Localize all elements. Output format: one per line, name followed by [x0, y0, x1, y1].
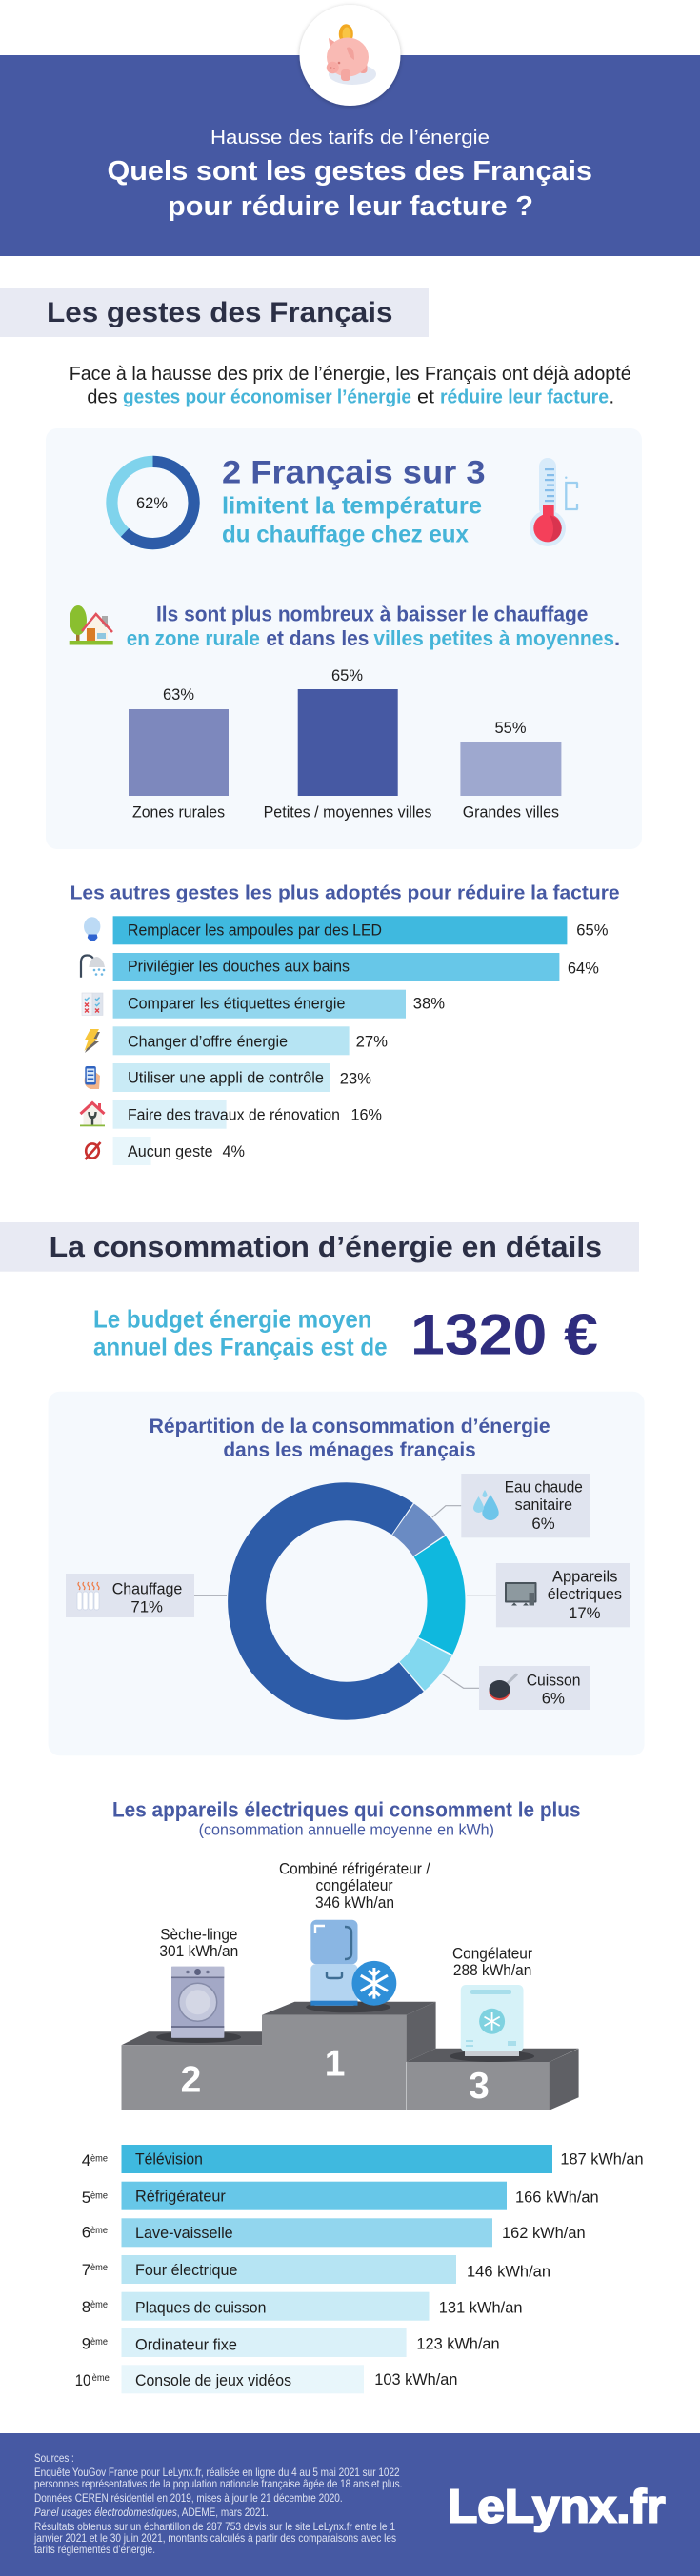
- heading: energy consumption: La consommation d’énergie en détails: [50, 1230, 602, 1263]
- panel: energy breakdown: [49, 1392, 645, 1755]
- main title: pour réduire leur facture ?: [168, 191, 533, 222]
- panel title: dans les ménages français: [223, 1439, 476, 1461]
- bar chart: other actions: 27%: [356, 1032, 388, 1050]
- ranking labels: 8: [82, 2298, 90, 2316]
- callout: hot water 6%: Eau chaude: [505, 1477, 583, 1496]
- logo: LeLynx.fr: LeLynx.fr: [448, 2481, 665, 2532]
- bar chart: other actions: Comparer les étiquettes énergie: [128, 994, 345, 1012]
- bar chart: other actions: 23%: [340, 1069, 371, 1087]
- bar chart: by area: 63%: [163, 685, 194, 703]
- podium: 2: [181, 2059, 201, 2100]
- icon: radiator: [77, 1582, 99, 1610]
- intro text: .: [610, 386, 614, 407]
- footer band: [0, 2433, 700, 2576]
- podium labels: [159, 1859, 532, 1979]
- callout: cooking 6%: [442, 1666, 590, 1710]
- heading: Les gestes des Français: [0, 288, 429, 337]
- bar chart: other actions: 16%: [350, 1106, 382, 1124]
- sources text: Sources :: [34, 2451, 74, 2465]
- sources text: [33, 2451, 402, 2556]
- subheading: rural areas: Ils sont plus nombreux à baisser le chauffage: [156, 603, 588, 626]
- panel title: Répartition de la consommation d’énergie: [150, 1416, 550, 1437]
- callout: heating 71%: Chauffage: [112, 1579, 182, 1597]
- intro text: et: [417, 386, 434, 407]
- icon: energy labels: [82, 993, 103, 1015]
- bar chart: appliances ranking: 166 kWh/an: [515, 2188, 599, 2206]
- podium labels: 301 kWh/an: [159, 1942, 238, 1960]
- heading: top appliances: Les appareils électriques qui consomment le plus: [112, 1797, 581, 1821]
- callout: annual budget: [93, 1302, 598, 1366]
- sources text: janvier 2021 et le 30 juin 2021, montants calculés à partir des comparaisons avec les: [33, 2531, 396, 2545]
- intro text: des: [87, 386, 117, 407]
- heading: other actions: Les autres gestes les plus adoptés pour réduire la facture: [70, 882, 620, 904]
- bar chart: other actions: Utiliser une appli de contrôle: [128, 1068, 324, 1086]
- bar chart: other actions: 38%: [413, 994, 445, 1012]
- bar chart: other actions: Aucun geste: [128, 1142, 213, 1160]
- callout: hot water 6%: [432, 1474, 590, 1537]
- callout: appliances 17%: 17%: [569, 1604, 601, 1622]
- icon: lightning: [84, 1029, 100, 1053]
- bar chart: other actions: 65%: [576, 921, 608, 940]
- icon: LED bulb: [84, 917, 100, 941]
- bar chart: appliances ranking: 146 kWh/an: [467, 2263, 550, 2281]
- callout: appliances 17%: [467, 1563, 630, 1627]
- icon: smartphone: [85, 1066, 100, 1089]
- ranking labels: 5: [82, 2189, 90, 2207]
- bar chart: appliances ranking: Ordinateur fixe: [135, 2335, 237, 2353]
- ranking labels: ème: [90, 2226, 108, 2236]
- headline: 2 Français sur 3: du chauffage chez eux: [222, 521, 469, 547]
- ranking labels: 4: [82, 2151, 90, 2170]
- bar chart: appliances ranking: Console de jeux vidéos: [135, 2371, 291, 2389]
- donut chart: energy use: [247, 1501, 447, 1701]
- podium labels: Congélateur: [452, 1944, 532, 1962]
- ranking labels: ème: [90, 2300, 108, 2310]
- callout: appliances 17%: électriques: [548, 1585, 622, 1603]
- main title: [107, 156, 592, 222]
- bar chart: other actions: Changer d’offre énergie: [128, 1032, 288, 1050]
- subheading: rural areas: [127, 603, 620, 650]
- bar chart: appliances ranking: 103 kWh/an: [374, 2370, 457, 2388]
- ranking labels: 10: [75, 2371, 90, 2389]
- heading: top appliances: (consommation annuelle moyenne en kWh): [199, 1821, 494, 1838]
- subheading: rural areas: en zone rurale: [127, 626, 260, 650]
- main title: Quels sont les gestes des Français: [107, 156, 592, 187]
- podium: [122, 2001, 579, 2110]
- bar chart: appliances ranking: 123 kWh/an: [416, 2334, 500, 2352]
- icon: freezer: [461, 1985, 524, 2056]
- bar chart: other actions: Privilégier les douches aux bains: [128, 958, 350, 976]
- sources text: Résultats obtenus sur un échantillon de 287 753 devis sur le site LeLynx.fr entre le 1: [34, 2520, 395, 2533]
- bar chart: by area: 55%: [495, 719, 526, 737]
- bar chart: other actions: Faire des travaux de rénovation: [128, 1106, 340, 1124]
- sources text: Données CEREN résidentiel en 2019, mises à jour le 21 décembre 2020.: [34, 2491, 343, 2505]
- callout: heating 71%: [66, 1574, 227, 1617]
- intro text: gestes pour économiser l’énergie: [123, 386, 411, 407]
- intro text: réduire leur facture: [440, 386, 609, 407]
- subheading: rural areas: et dans les: [266, 626, 369, 650]
- bar chart: other actions: 4%: [223, 1142, 245, 1160]
- header band: [0, 55, 700, 256]
- ranking labels: 6: [82, 2224, 90, 2242]
- panel: heating: [46, 428, 642, 849]
- bar chart: appliances ranking: [122, 2145, 644, 2393]
- bar chart: appliances ranking: 162 kWh/an: [502, 2224, 586, 2242]
- icon: piggy bank in circle: [299, 5, 400, 106]
- podium labels: 346 kWh/an: [315, 1893, 394, 1912]
- sources text: Enquête YouGov France pour LeLynx.fr, réalisée en ligne du 4 au 5 mai 2021 sur 1022: [34, 2466, 400, 2479]
- icon: shower: [81, 956, 105, 978]
- intro text: [70, 364, 631, 407]
- heading: Les gestes des Français: Les gestes des Français: [47, 297, 393, 328]
- sources text: Panel usages électrodomestiques, ADEME, mars 2021.: [34, 2506, 269, 2519]
- bar chart: appliances ranking: Réfrigérateur: [135, 2187, 226, 2205]
- icon: thermometer: [530, 458, 578, 546]
- subheading: rural areas: villes petites à moyennes: [373, 626, 614, 650]
- podium labels: 288 kWh/an: [453, 1961, 531, 1979]
- podium labels: congélateur: [316, 1876, 393, 1894]
- ranking labels: 9: [82, 2335, 90, 2353]
- podium: 3: [469, 2066, 490, 2107]
- donut chart: 62%: 62%: [136, 494, 168, 512]
- icon: house repair: [80, 1102, 105, 1126]
- bar chart: by area: Grandes villes: [463, 803, 559, 821]
- headline: 2 Français sur 3: [222, 454, 486, 547]
- heading: top appliances: [112, 1797, 581, 1838]
- callout: annual budget: Le budget énergie moyen: [93, 1304, 371, 1333]
- bar chart: appliances ranking: Four électrique: [135, 2261, 237, 2279]
- headline: 2 Français sur 3: limitent la température: [222, 492, 482, 519]
- callout: heating 71%: 71%: [130, 1597, 163, 1615]
- callout: cooking 6%: Cuisson: [527, 1672, 581, 1690]
- header subtitle: Hausse des tarifs de l’énergie: [210, 128, 490, 149]
- panel title: [150, 1416, 550, 1461]
- icon: television: [505, 1582, 537, 1605]
- callout: annual budget: annuel des Français est de: [93, 1332, 387, 1360]
- callout: cooking 6%: 6%: [542, 1689, 565, 1707]
- bar chart: by area: Petites / moyennes villes: [264, 803, 431, 821]
- callout: annual budget: 1320 €: [410, 1302, 598, 1366]
- icon: dryer: [171, 1967, 224, 2038]
- ranking labels: ème: [90, 2263, 108, 2273]
- bar chart: appliances ranking: Télévision: [135, 2150, 203, 2168]
- sources text: tarifs réglementés d’énergie.: [34, 2543, 155, 2556]
- callout: hot water 6%: sanitaire: [515, 1496, 572, 1514]
- subheading: rural areas: .: [614, 626, 620, 650]
- podium labels: Sèche-linge: [160, 1925, 237, 1943]
- ranking labels: ème: [92, 2373, 110, 2384]
- bar chart: appliances ranking: 131 kWh/an: [439, 2298, 522, 2316]
- icon: water drops: [473, 1490, 499, 1520]
- icon: frying pan: [490, 1674, 517, 1700]
- bar chart: appliances ranking: 187 kWh/an: [560, 2150, 644, 2168]
- bar chart: by area: Zones rurales: [132, 803, 225, 821]
- bar chart: other actions: [113, 916, 609, 1165]
- bar chart: appliances ranking: Plaques de cuisson: [135, 2298, 266, 2316]
- icon: none symbol: [86, 1142, 101, 1159]
- bar chart: other actions: 64%: [568, 960, 599, 978]
- headline: 2 Français sur 3: 2 Français sur 3: [222, 454, 486, 490]
- ranking labels: [75, 2151, 110, 2389]
- sources text: personnes représentatives de la population nationale française âgée de 18 ans et plus.: [34, 2477, 402, 2490]
- icon: house and tree: [70, 605, 113, 645]
- ranking labels: ème: [90, 2191, 108, 2201]
- bar chart: other actions: Remplacer les ampoules par des LED: [128, 921, 382, 940]
- donut chart: 62%: [111, 462, 194, 544]
- bar chart: by area: 65%: [331, 666, 363, 684]
- icon: fridge freezer: [310, 1920, 396, 2006]
- bar chart: by area: [129, 666, 561, 821]
- callout: appliances 17%: Appareils: [552, 1568, 617, 1586]
- heading: energy consumption: [0, 1222, 639, 1272]
- intro text: Face à la hausse des prix de l’énergie, les Français ont déjà adopté: [70, 364, 631, 385]
- podium: 1: [325, 2044, 345, 2085]
- bar chart: appliances ranking: Lave-vaisselle: [135, 2224, 233, 2242]
- ranking labels: 7: [82, 2261, 90, 2279]
- ranking labels: ème: [90, 2337, 108, 2348]
- ranking labels: ème: [90, 2154, 108, 2165]
- callout: hot water 6%: 6%: [531, 1515, 555, 1533]
- podium labels: Combiné réfrigérateur /: [279, 1859, 430, 1877]
